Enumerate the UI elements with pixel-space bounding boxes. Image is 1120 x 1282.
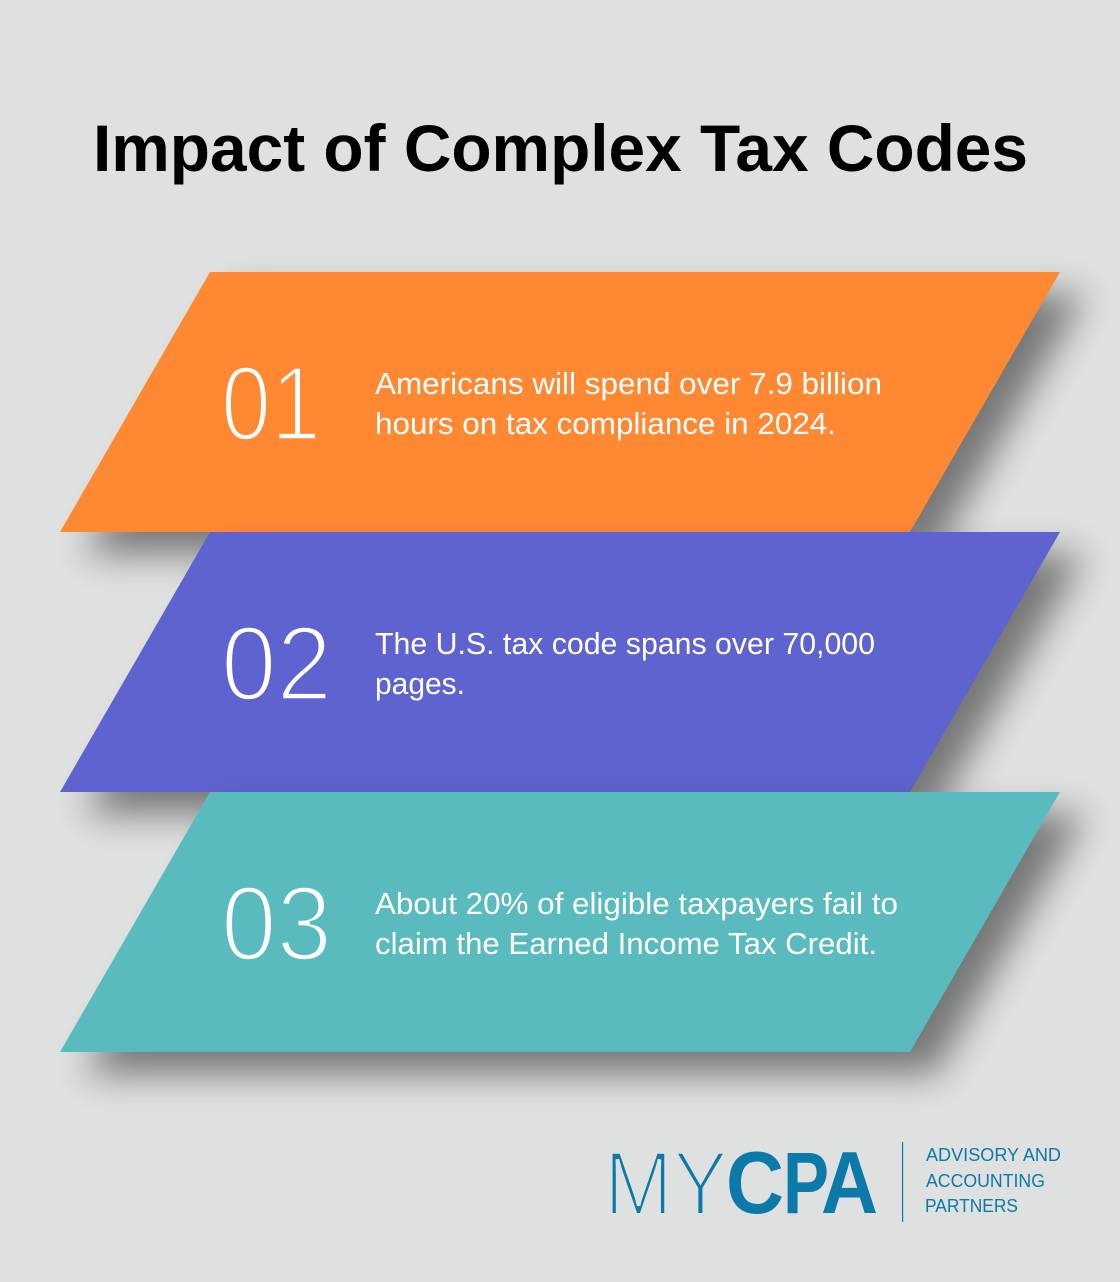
logo: MYCPA xyxy=(604,1133,1061,1235)
logo: MYCPA: P xyxy=(783,1135,829,1232)
logo: MYCPA: ACCOUNTING xyxy=(926,1170,1045,1191)
number 02: 02 xyxy=(221,605,332,723)
logo: MYCPA: MY xyxy=(604,1133,728,1235)
panel: 02 tax code length xyxy=(60,532,1085,814)
logo: MYCPA: ADVISORY AND xyxy=(926,1144,1061,1165)
text: compliance hours xyxy=(375,367,882,441)
logo: MYCPA: PARTNERS xyxy=(925,1195,1018,1216)
text: unclaimed credit: claim the Earned Income Tax Credit. xyxy=(375,927,877,961)
text: tax code pages: The U.S. tax code spans over 70,000 xyxy=(375,627,875,661)
text: unclaimed credit xyxy=(375,887,898,961)
text: compliance hours: Americans will spend over 7.9 billion xyxy=(375,367,882,401)
panel: 03 tax credit xyxy=(60,792,1085,1074)
number 01: 01 xyxy=(221,345,321,463)
text: tax code pages xyxy=(375,627,875,701)
text: compliance hours: hours on tax compliance in 2024. xyxy=(375,407,836,441)
text: tax code pages: pages. xyxy=(375,667,465,701)
number 03: 03 xyxy=(221,865,332,983)
title: Impact of Complex Tax Codes xyxy=(93,111,1028,185)
text: unclaimed credit: About 20% of eligible taxpayers fail to xyxy=(375,887,898,921)
logo: MYCPA: A xyxy=(821,1133,878,1232)
panel: 01 hours on compliance xyxy=(60,272,1085,554)
logo: MYCPA: C xyxy=(726,1133,784,1232)
